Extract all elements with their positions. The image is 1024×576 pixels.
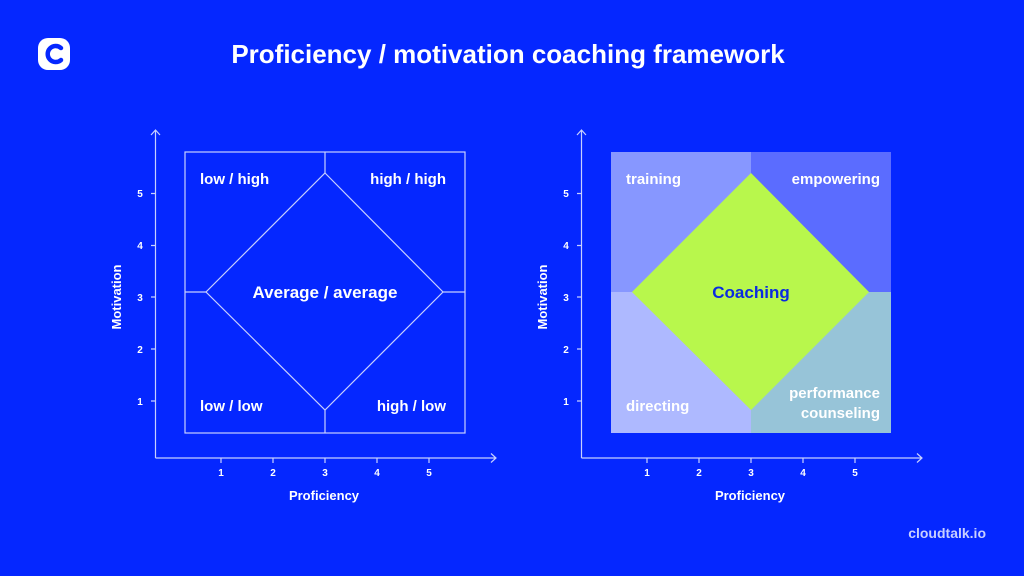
chart: right matrix: 4 — [800, 468, 806, 479]
chart: left matrix: high / high — [370, 171, 446, 188]
icon: logo — [38, 38, 70, 70]
chart: right matrix — [535, 130, 922, 503]
chart: left matrix: 2 — [270, 468, 276, 479]
chart: right matrix: 4 — [563, 241, 569, 252]
chart: right matrix: 5 — [852, 468, 858, 479]
axis label: Motivation: Motivation — [109, 264, 124, 330]
chart: right matrix: empowering — [792, 171, 880, 188]
chart: right matrix: training — [626, 171, 681, 188]
chart: left matrix: 1 — [218, 468, 224, 479]
chart: left matrix: low / high — [200, 171, 269, 188]
chart: left matrix: low / low — [200, 398, 263, 415]
chart: right matrix: Motivation — [535, 264, 550, 330]
chart: right matrix: Proficiency — [715, 488, 786, 503]
chart: right matrix: 3 — [563, 293, 569, 304]
chart: right matrix: counseling — [801, 405, 880, 422]
chart: left matrix: 2 — [137, 345, 143, 356]
chart: left matrix: Average / average — [253, 283, 397, 302]
chart: right matrix: 2 — [563, 345, 569, 356]
title: Proficiency / motivation coaching framework — [231, 39, 785, 69]
chart: right matrix: directing — [626, 398, 689, 415]
chart: right matrix: 1 — [644, 468, 650, 479]
chart: left matrix — [109, 130, 496, 503]
chart: right matrix: 2 — [696, 468, 702, 479]
chart: right matrix: 5 — [563, 189, 569, 200]
chart: left matrix: 4 — [374, 468, 380, 479]
chart: right matrix: 1 — [563, 397, 569, 408]
footer brand: cloudtalk.io — [908, 525, 986, 541]
chart: right matrix: Coaching — [712, 283, 790, 302]
chart: right matrix: 3 — [748, 468, 754, 479]
chart: left matrix: 3 — [137, 293, 143, 304]
chart: left matrix: 5 — [137, 189, 143, 200]
chart: left matrix: 1 — [137, 397, 143, 408]
chart: left matrix: 5 — [426, 468, 432, 479]
chart: right matrix: performance — [789, 385, 880, 402]
axis label: Proficiency: Proficiency — [289, 488, 360, 503]
chart: left matrix: high / low — [377, 398, 446, 415]
chart: left matrix: 4 — [137, 241, 143, 252]
chart: left matrix: 3 — [322, 468, 328, 479]
